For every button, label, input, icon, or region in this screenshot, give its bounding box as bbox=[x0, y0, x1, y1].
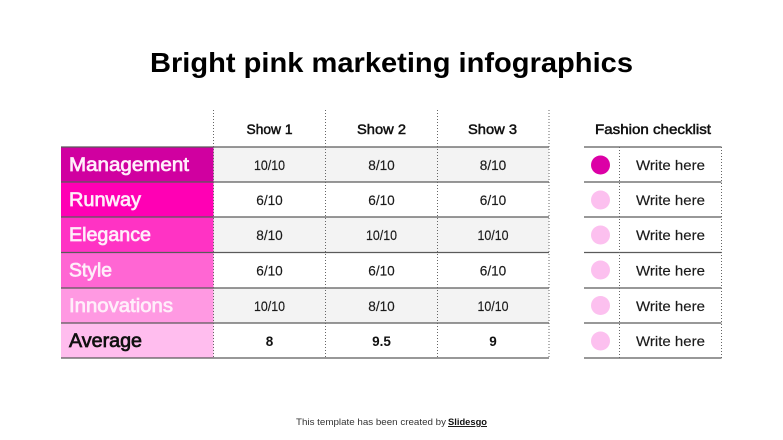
score values: 10/10 bbox=[478, 298, 509, 314]
score values: 8/10 bbox=[480, 157, 506, 173]
score values: 6/10 bbox=[256, 192, 283, 208]
checklist items: Write here bbox=[636, 192, 705, 208]
score values: 10/10 bbox=[478, 227, 509, 243]
score values: 8/10 bbox=[368, 298, 395, 314]
score values: 9 bbox=[489, 334, 497, 349]
row labels: Management bbox=[69, 155, 190, 176]
checklist heading: Fashion checklist bbox=[595, 121, 711, 137]
score values: 8 bbox=[266, 334, 274, 349]
score values: 8/10 bbox=[256, 227, 283, 243]
footer credit: Slidesgo bbox=[448, 417, 487, 428]
score values: 10/10 bbox=[254, 157, 285, 173]
score values: 8/10 bbox=[368, 157, 395, 173]
row labels: Elegance bbox=[69, 225, 151, 246]
score values bbox=[254, 157, 509, 349]
checklist items: Write here bbox=[636, 333, 705, 349]
row labels: Style bbox=[69, 260, 112, 282]
score values: 6/10 bbox=[256, 262, 283, 278]
checklist items bbox=[636, 157, 705, 349]
row label backgrounds bbox=[61, 147, 214, 358]
score values: 9.5 bbox=[372, 334, 391, 349]
score values: 6/10 bbox=[368, 192, 395, 208]
score values: 6/10 bbox=[480, 192, 506, 208]
column headers: Show 2 bbox=[357, 121, 406, 137]
row labels bbox=[69, 155, 190, 352]
row labels: Innovations bbox=[69, 296, 173, 317]
score values: 10/10 bbox=[366, 227, 397, 243]
alternating row shading bbox=[214, 147, 549, 323]
checklist items: Write here bbox=[636, 157, 705, 173]
panel: score table bbox=[61, 110, 549, 358]
checklist items: Write here bbox=[636, 262, 705, 278]
title: Bright pink marketing infographics bbox=[150, 47, 633, 78]
footer credit: This template has been created by bbox=[296, 417, 446, 428]
row labels: Runway bbox=[69, 190, 142, 211]
row labels: Average bbox=[69, 331, 142, 352]
panel: fashion checklist bbox=[584, 121, 722, 358]
column headers: Show 1 bbox=[246, 121, 293, 137]
score values: 10/10 bbox=[254, 298, 285, 314]
column headers: Show 3 bbox=[468, 121, 517, 137]
column headers bbox=[246, 121, 517, 137]
score values: 6/10 bbox=[368, 262, 395, 278]
checklist items: Write here bbox=[636, 227, 705, 243]
checklist items: Write here bbox=[636, 298, 705, 314]
status dots bbox=[591, 156, 610, 350]
score values: 6/10 bbox=[480, 262, 506, 278]
